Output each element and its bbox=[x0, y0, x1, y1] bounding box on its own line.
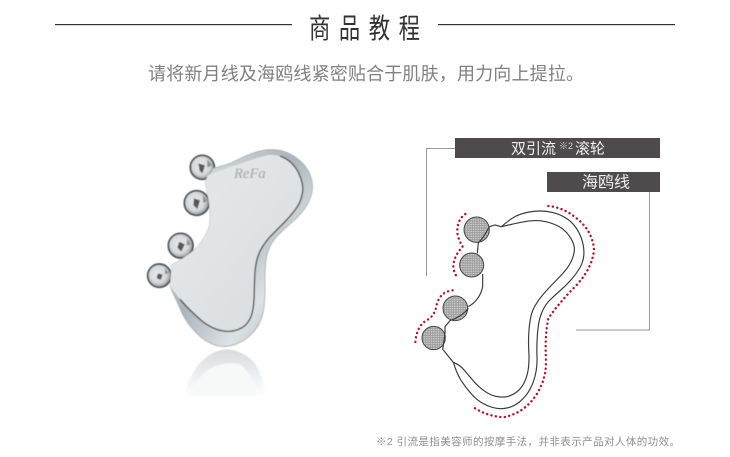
outer outline bbox=[453, 211, 584, 409]
label text: 海鸥线 bbox=[582, 174, 630, 192]
subtitle: 请将新月线及海鸥线紧密贴合于肌肤，用力向上提拉。 bbox=[148, 64, 584, 84]
dotted line: upper rollers bbox=[453, 214, 465, 277]
title text: 商品教程 bbox=[309, 13, 420, 45]
inner dark seam bbox=[180, 156, 303, 331]
footnote: ※2 引流是指美容师的按摩手法，并非表示产品对人体的功效。 bbox=[376, 435, 680, 448]
dotted line: outer edge bbox=[474, 206, 594, 417]
icon: mesh rollers bbox=[422, 217, 489, 350]
label bar: double rollers bbox=[455, 138, 660, 158]
device outline diagram bbox=[415, 206, 594, 417]
leader line: rollers bbox=[426, 148, 455, 276]
dotted line: lower rollers bbox=[415, 290, 453, 342]
icon: device face bbox=[170, 155, 303, 331]
icon: rollers bbox=[148, 155, 214, 287]
logo: ReFa bbox=[233, 166, 266, 182]
icon: reflection bbox=[185, 349, 265, 396]
icon: device body bbox=[170, 150, 313, 347]
label text: 双引流 bbox=[511, 140, 556, 158]
inner outline bbox=[443, 221, 574, 397]
label bar: seagull line bbox=[547, 172, 660, 192]
product photo: roller device bbox=[148, 150, 313, 396]
label superscript: ※2 bbox=[559, 141, 573, 151]
label text: 滚轮 bbox=[575, 140, 605, 158]
roller connectors bbox=[443, 227, 489, 350]
leader line: seagull line bbox=[576, 192, 650, 330]
